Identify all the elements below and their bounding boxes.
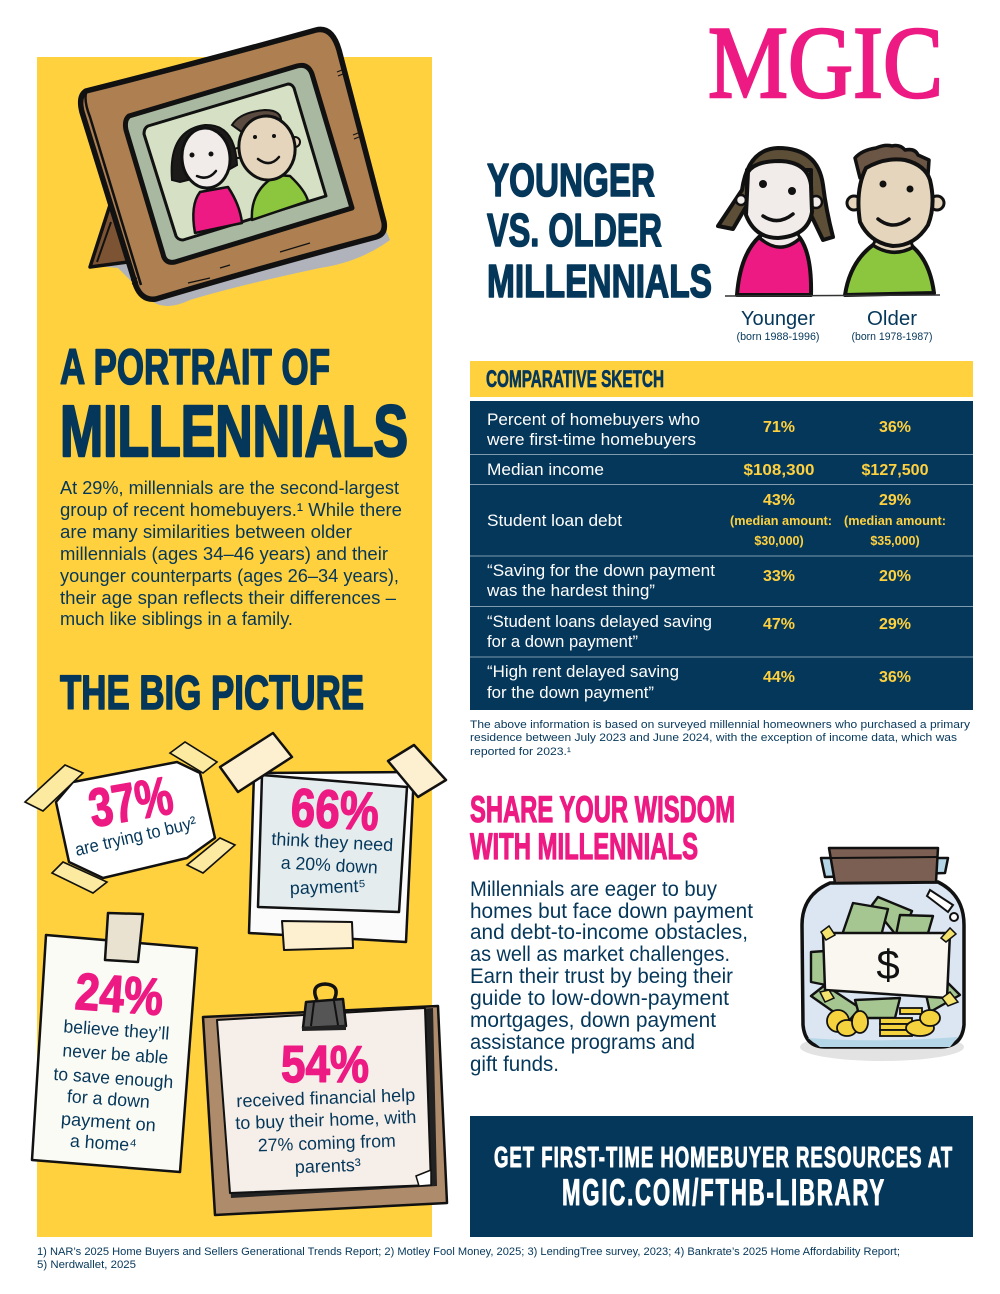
heading: share your wisdom: WITH MILLENNIALS <box>470 826 698 867</box>
man in frame <box>232 110 308 220</box>
text block: table footnote: reported for 2023.¹ <box>470 746 571 758</box>
table: comparison: 43% <box>763 492 795 509</box>
note: 66 percent: a 20% down <box>280 852 378 878</box>
note: 37 percent: are trying to buy² <box>73 812 198 860</box>
text block: sources: 1) NAR’s 2025 Home Buyers and Sellers Generational Trends Report; 2) Motley Fool Money, 2025; 3) LendingTree survey, 2023; 4) Bankrate’s 2025 Home Affordability Report; <box>37 1246 900 1258</box>
heading: a portrait of millennials <box>60 339 408 472</box>
logo: MGIC: MGIC <box>708 6 943 120</box>
table: comparison: “High rent delayed saving <box>487 662 679 681</box>
text block: wisdom: as well as market challenges. <box>470 943 730 966</box>
table: comparison: $35,000) <box>870 534 920 548</box>
table: comparison: were first-time homebuyers <box>486 430 696 449</box>
text block: table footnote: The above information is based on surveyed millennial homeowners who purchased a primary <box>470 719 970 731</box>
table: comparison: Percent of homebuyers who <box>487 410 700 429</box>
table: comparison: for a down payment” <box>487 632 638 651</box>
heading: a portrait of millennials: A PORTRAIT OF <box>60 339 330 395</box>
table: comparison: 47% <box>763 616 795 633</box>
icon: money jar <box>800 848 964 1061</box>
note: 66 percent: payment⁵ <box>289 876 366 898</box>
text block: sources <box>37 1246 900 1271</box>
note: 54 percent on clipboard: to buy their home, with <box>235 1107 417 1133</box>
note: 24 percent: a home⁴ <box>69 1131 138 1155</box>
text block: intro: At 29%, millennials are the second-largest <box>60 477 399 498</box>
note: 54 percent on clipboard: parents³ <box>294 1155 361 1177</box>
table: comparison: Median income <box>487 460 604 479</box>
table: comparison: Student loan debt <box>487 511 622 530</box>
heading: younger vs older millennials <box>487 154 712 307</box>
table: comparison: 29% <box>879 492 911 509</box>
text block: intro <box>60 477 402 629</box>
heading: younger vs older millennials: VS. OLDER <box>487 204 662 256</box>
text block: intro: their age span reflects their differences – <box>60 587 397 608</box>
table: comparison: 36% <box>879 419 911 436</box>
table: comparison: was the hardest thing” <box>486 581 655 600</box>
heading: share your wisdom: SHARE YOUR WISDOM <box>470 789 735 830</box>
note: 24 percent: never be able <box>62 1040 169 1068</box>
table: comparison: 36% <box>879 669 911 686</box>
woman in frame <box>172 125 242 233</box>
table: comparison: $108,300 <box>744 462 815 479</box>
coins <box>827 1008 940 1036</box>
labels: generations <box>736 308 932 343</box>
heading: a portrait of millennials: MILLENNIALS <box>60 392 408 472</box>
labels: generations: (born 1978-1987) <box>852 331 932 343</box>
text block: intro: younger counterparts (ages 26–34 years), <box>60 565 399 586</box>
panel: comparative sketch header: COMPARATIVE SKETCH <box>486 366 664 393</box>
note: 24 percent: for a down <box>66 1086 151 1112</box>
label <box>823 933 950 998</box>
text block: wisdom: Millennials are eager to buy <box>470 878 717 901</box>
table: comparison: $30,000) <box>754 534 804 548</box>
table: comparison: 71% <box>763 419 795 436</box>
panel: yellow left column <box>37 57 432 1237</box>
panel: call to action: GET FIRST-TIME HOMEBUYER RESOURCES AT <box>494 1142 952 1174</box>
money bills <box>811 897 960 1022</box>
icon: binder clip <box>302 984 346 1031</box>
note: 24 percent <box>32 913 197 1172</box>
heading: younger vs older millennials: MILLENNIALS <box>487 255 712 307</box>
note: 66 percent: 66% <box>289 778 380 842</box>
labels: generations: Younger <box>741 308 815 330</box>
text block: wisdom: gift funds. <box>470 1053 559 1076</box>
heading: share your wisdom <box>470 789 735 867</box>
note: 54 percent on clipboard: 54% <box>281 1036 369 1094</box>
text block: intro: group of recent homebuyers.¹ While there <box>60 499 402 520</box>
text block: wisdom: mortgages, down payment <box>470 1009 716 1032</box>
table: comparison: 33% <box>763 568 795 585</box>
icon: younger millennial <box>718 148 833 295</box>
table: comparison: 44% <box>763 669 795 686</box>
note: 54 percent on clipboard: received financial help <box>236 1085 416 1111</box>
note: 66 percent <box>220 733 446 950</box>
text block: wisdom: homes but face down payment <box>470 900 753 923</box>
table: comparison: “Student loans delayed saving <box>487 612 712 631</box>
table: comparison: 20% <box>879 568 911 585</box>
panel: comparative sketch header <box>470 361 973 397</box>
text block: sources: 5) Nerdwallet, 2025 <box>37 1259 136 1271</box>
labels: generations: (born 1988-1996) <box>736 331 820 343</box>
panel: call to action: MGIC.COM/FTHB-LIBRARY <box>562 1172 884 1213</box>
icon: older millennial <box>725 145 944 296</box>
table: comparison <box>470 401 973 710</box>
text block: wisdom <box>470 878 753 1076</box>
table: comparison: for the down payment” <box>487 683 654 702</box>
text block: intro: much like siblings in a family. <box>60 608 293 629</box>
text block: wisdom: Earn their trust by being their <box>470 965 733 988</box>
text block: wisdom: assistance programs and <box>470 1031 695 1054</box>
note: 24 percent: believe they’ll <box>63 1016 170 1044</box>
table: comparison: “Saving for the down payment <box>487 561 715 580</box>
icon: money jar: $ <box>876 941 900 988</box>
heading: younger vs older millennials: YOUNGER <box>487 154 655 206</box>
text block: wisdom: guide to low-down-payment <box>470 987 729 1010</box>
note: 54 percent on clipboard <box>203 984 447 1215</box>
heading: the big picture: THE BIG PICTURE <box>60 667 364 720</box>
table: comparison: (median amount: <box>730 514 832 528</box>
table: comparison: $127,500 <box>862 462 929 479</box>
note: 37 percent: 37% <box>84 765 177 839</box>
note: 37 percent <box>25 742 235 893</box>
panel: call to action <box>470 1116 973 1237</box>
text block: table footnote <box>470 719 970 758</box>
text block: intro: are many similarities between older <box>60 521 352 542</box>
note: 24 percent: to save enough <box>53 1064 174 1092</box>
text block: intro: millennials (ages 34–46 years) and their <box>60 543 388 564</box>
note: 24 percent: 24% <box>73 963 165 1027</box>
table: comparison: 29% <box>879 616 911 633</box>
note: 24 percent: payment on <box>60 1109 157 1135</box>
icon: picture frame with couple <box>81 29 390 306</box>
note: 66 percent: think they need <box>271 829 394 855</box>
labels: generations: Older <box>867 308 917 330</box>
text block: table footnote: residence between July 2023 and June 2024, with the exception of income data, which was <box>470 732 957 744</box>
text block: wisdom: and debt-to-income obstacles, <box>470 921 748 944</box>
note: 54 percent on clipboard: 27% coming from <box>257 1131 396 1155</box>
table: comparison: (median amount: <box>844 514 946 528</box>
